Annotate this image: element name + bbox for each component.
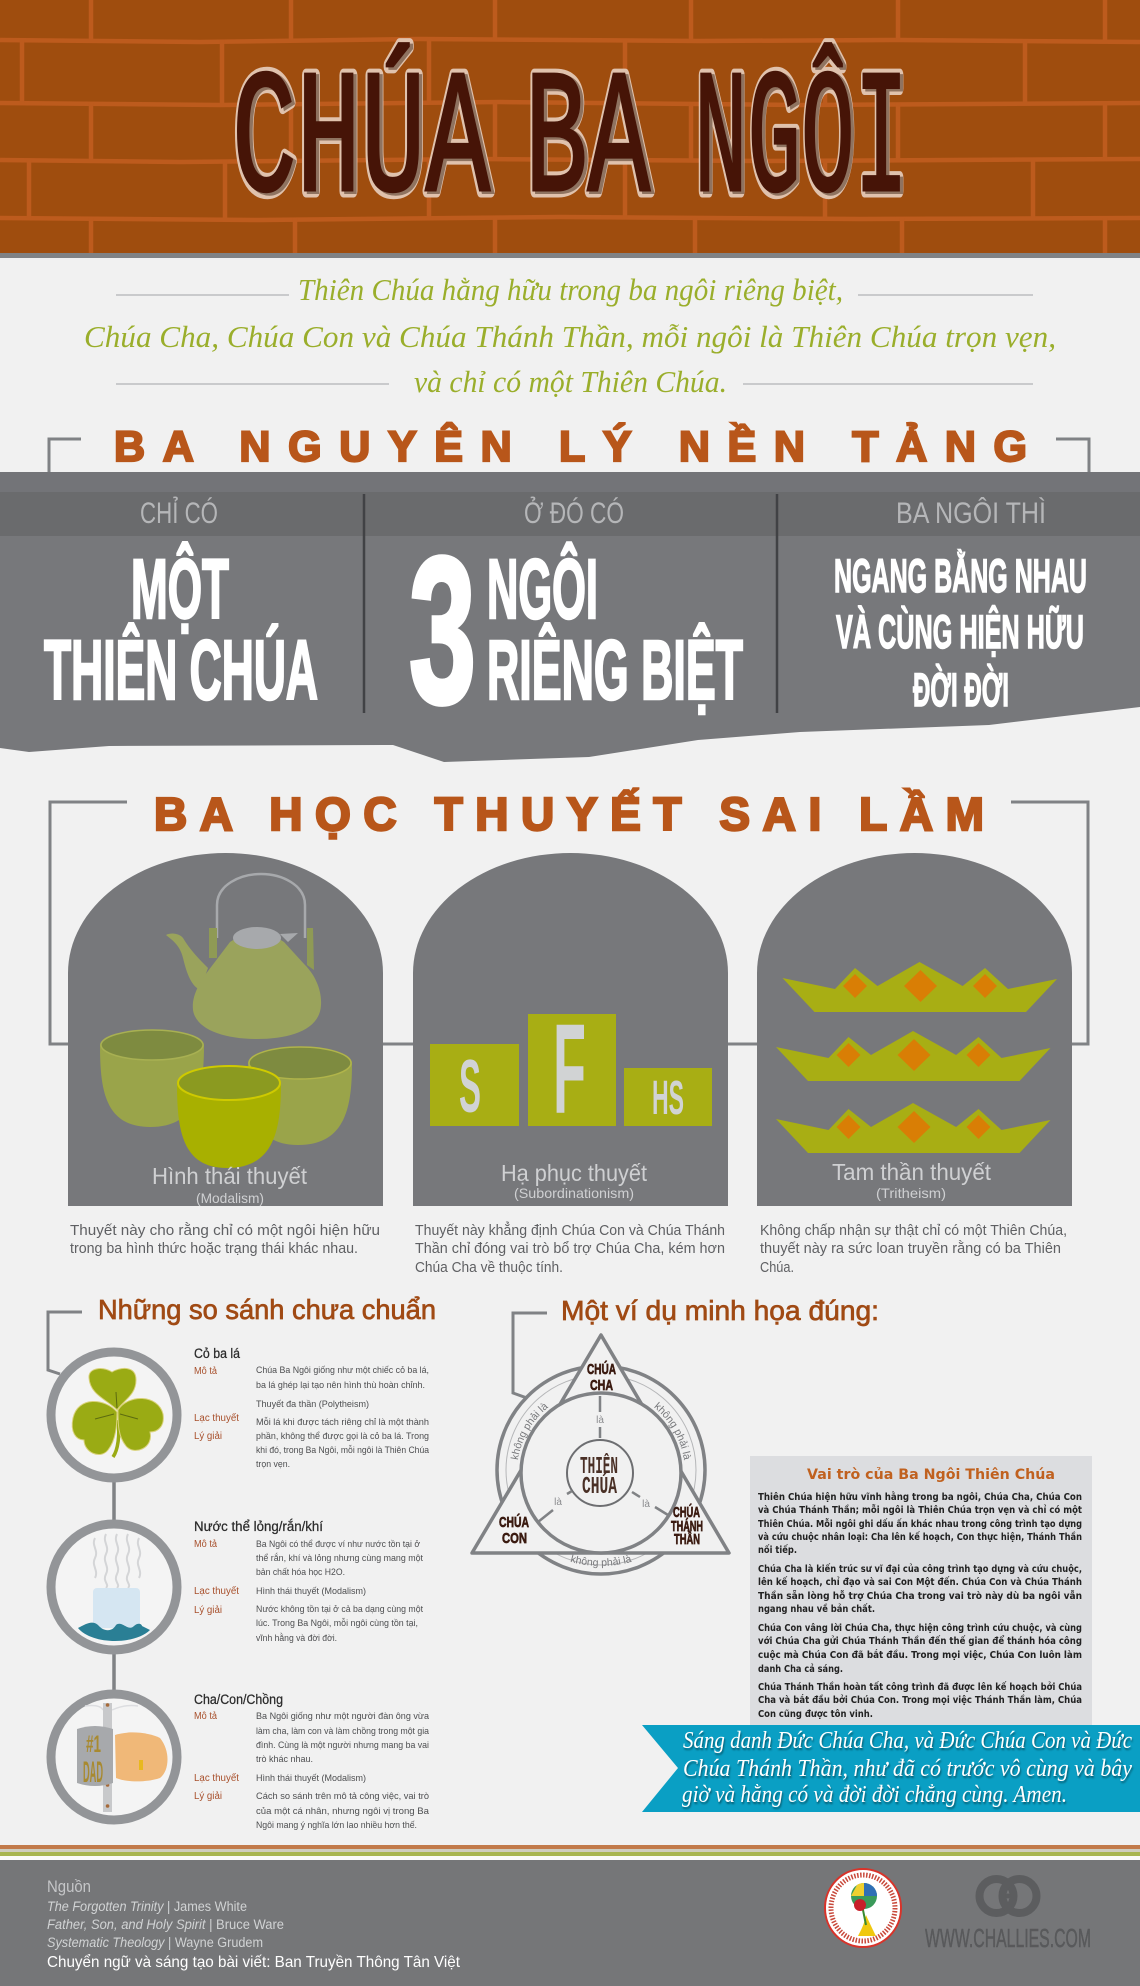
text block: tritheism: thuyết này ra sức loan truyền rằng có ba Thiên (760, 1240, 1061, 1257)
text block: modalism: Thuyết này cho rằng chỉ có một ngôi hiện hữu (70, 1222, 380, 1239)
arch caption: Tam thần thuyết (832, 1159, 992, 1185)
footer stripes (0, 1845, 1140, 1860)
text block: subordinationism (415, 1221, 725, 1276)
roles text: Thần sẵn lòng hỗ trợ Chúa Cha trong vai trò này dù ba ngôi vẫn (758, 1589, 1082, 1602)
title: NGÔI (697, 45, 911, 245)
text block: father son husband: làm cha, làm con và làm chồng trong một gia (256, 1726, 430, 1737)
text block: subordinationism: Thần chỉ đóng vai trò bổ trợ Chúa Cha, kém hơn (415, 1240, 725, 1257)
arch caption (832, 1159, 992, 1201)
diagram labels: là (554, 1415, 650, 1510)
arch caption: (Subordinationism) (514, 1185, 634, 1201)
icon: crown top (782, 962, 1057, 1012)
text block: clover: Mỗi lá khi được tách riêng chỉ là một thành (256, 1417, 429, 1428)
icon: water states (51, 1524, 177, 1650)
text block: water (194, 1519, 423, 1644)
text block: clover: Cỏ ba lá (194, 1346, 240, 1361)
column: three persons: NGÔI (487, 542, 598, 636)
icon: dad mug (51, 1694, 177, 1820)
roles text: Thiên Chúa. Mỗi ngôi ghi dấu ấn khác nhau trong công trình tạo dựng (758, 1517, 1082, 1530)
column: equal and eternal: ĐỜI ĐỜI (913, 663, 1009, 716)
icon: clover (51, 1352, 177, 1478)
title: BA (528, 45, 653, 245)
intro text block: Thiên Chúa hằng hữu trong ba ngôi riêng biệt, (298, 272, 843, 307)
column: equal and eternal: BA NGÔI THÌ (896, 496, 1046, 530)
block: HS (624, 1068, 712, 1126)
heading: ba học thuyết sai lầm: BA HỌC THUYẾT SAI LẦM (154, 788, 984, 840)
panel: modalism (68, 853, 383, 1206)
panel: subordinationism (413, 853, 728, 1206)
text block: clover: Chúa Ba Ngôi giống như một chiếc cỏ ba lá, (256, 1365, 429, 1376)
icon: crown bottom (776, 1103, 1050, 1153)
sources: Nguồn (47, 1877, 91, 1896)
title (232, 43, 911, 245)
heading: những so sánh chưa chuẩn: Những so sánh chưa chuẩn (98, 1294, 436, 1325)
text block: water: Hình thái thuyết (Modalism) (256, 1586, 366, 1597)
diagram labels: là: là (642, 1499, 650, 1510)
icon: front cup (177, 1066, 281, 1168)
intro text block: Chúa Cha, Chúa Con và Chúa Thánh Thần, mỗi ngôi là Thiên Chúa trọn vẹn, (84, 319, 1056, 354)
text block: tritheism (760, 1222, 1067, 1276)
title: CHÚA (233, 44, 491, 244)
icon: right cup (248, 1047, 352, 1145)
text block: water: bản chất hóa học H2O. (256, 1567, 345, 1578)
arch caption: Hạ phục thuyết (501, 1160, 648, 1186)
text block: water: vĩnh hằng và đời đời. (256, 1633, 337, 1644)
arch caption (501, 1160, 648, 1201)
diagram labels: không phải là: không phải là (654, 1402, 691, 1460)
banner: doxology (642, 1725, 1140, 1812)
text block: subordinationism: Thuyết này khẳng định Chúa Con và Chúa Thánh (415, 1221, 725, 1239)
roles text: Chúa Con vâng lời Chúa Cha, thực hiện công trình cứu chuộc, và cùng (758, 1622, 1082, 1634)
text block: subordinationism: Chúa Cha về thuộc tính. (415, 1259, 563, 1276)
roles text: danh Cha cả sáng. (758, 1663, 843, 1675)
panel: footer (0, 1860, 1140, 1986)
diagram corner labels: CON (502, 1530, 527, 1547)
text block: father son husband: trò khác nhau. (256, 1754, 313, 1765)
text block: father son husband: Mô tả (194, 1711, 217, 1722)
diagram labels: không phải là: không phải là (570, 1554, 632, 1568)
diagram corner labels: CHÚA (587, 1360, 616, 1378)
text block: father son husband (194, 1692, 430, 1831)
icon: community logo (825, 1869, 901, 1947)
column: three persons: RIÊNG BIỆT (487, 623, 743, 717)
column: one God (44, 496, 318, 717)
text block: father son husband: Lý giải (194, 1791, 222, 1802)
text block: modalism (70, 1222, 380, 1257)
icon: dad mug: DAD (83, 1756, 103, 1789)
icon: left cup (100, 1030, 204, 1127)
sources: Systematic Theology | Wayne Grudem (47, 1935, 263, 1950)
text block: water: Lạc thuyết (194, 1585, 239, 1597)
comparison connector (112, 1480, 116, 1692)
diagram corner labels: THÁNH (671, 1518, 703, 1535)
roles text: cuộc mà Chúa Con đã bắt đầu. Trong mọi việc, Chúa Con luôn làm (758, 1648, 1082, 1661)
column: three persons (409, 496, 743, 747)
text block: father son husband: Lạc thuyết (194, 1772, 239, 1784)
title: NGÔI (694, 43, 908, 243)
roles text: Con cũng được tôn vinh. (758, 1708, 873, 1720)
text block: water: Ba Ngôi có thể được ví như nước tồn tại ở (256, 1539, 420, 1550)
diagram corner labels: CHA (590, 1377, 613, 1394)
arch caption: (Modalism) (196, 1190, 264, 1206)
text block: father son husband: Hình thái thuyết (Modalism) (256, 1773, 366, 1784)
column: equal and eternal (834, 496, 1087, 716)
icon: crown middle (776, 1031, 1050, 1081)
title: BA (525, 43, 650, 243)
column: one God: CHỈ CÓ (140, 496, 218, 530)
roles text: Cha và bắt đầu bởi Chúa Con. Trong mọi việc Thánh Thần làm, Chúa (758, 1693, 1082, 1706)
sources: The Forgotten Trinity | James White (47, 1899, 247, 1914)
text block: father son husband: Ba Ngôi giống như một người đàn ông vừa (256, 1711, 430, 1722)
block: HS: HS (652, 1072, 684, 1125)
panel: roles of the trinity: Vai trò của Ba Ngôi Thiên Chúa (807, 1467, 1055, 1483)
roles text: với Chúa Cha gửi Chúa Thánh Thần đến thế gian để thánh hóa công (758, 1634, 1082, 1647)
heading: một ví dụ minh họa đúng: Một ví dụ minh họa đúng: (561, 1295, 879, 1326)
text block: clover: trọn vẹn. (256, 1459, 290, 1470)
column: one God: THIÊN CHÚA (44, 623, 318, 717)
diagram center: thiên chúa: CHÚA (582, 1472, 617, 1501)
roles text: lên kế hoạch, chỉ đạo và sai Con Một đến. Chúa Con và Chúa Thánh (758, 1575, 1082, 1588)
text block: water: Lý giải (194, 1605, 222, 1616)
roles text: Chúa Cha là kiến trúc sư vĩ đại của công trình tạo dựng và cứu chuộc, (758, 1562, 1082, 1575)
diagram corner labels: CHÚA (499, 1513, 529, 1531)
text block: water: lúc. Trong Ba Ngôi, mỗi ngôi cùng tồn tại, (256, 1618, 418, 1629)
title: CHÚA (232, 43, 490, 243)
column: three persons: Ở ĐÓ CÓ (524, 496, 624, 530)
diagram corner labels (499, 1360, 703, 1548)
panel: tritheism (757, 853, 1072, 1206)
text block: clover: Mô tả (194, 1366, 217, 1377)
diagram labels: là: là (596, 1415, 604, 1426)
banner: doxology: giờ và hằng có và đời đời chẳng cùng. Amen. (682, 1781, 1067, 1808)
block: F (528, 998, 616, 1141)
title: CHÚA (235, 45, 493, 245)
roles text: và cứu chuộc nhân loại: Cha lên kế hoạch, Con thực hiện, Thánh Thần (758, 1530, 1082, 1543)
text block: father son husband: Cách so sánh trên mô tả công việc, vai trò (256, 1791, 429, 1802)
text block: clover: phần, không thể được gọi là cỏ ba lá. Trong (256, 1431, 429, 1442)
block: F: F (553, 998, 586, 1141)
diagram corner labels: THẦN (674, 1531, 700, 1548)
text block: water: Nước không tồn tại ở cả ba dạng cùng một (256, 1604, 423, 1615)
roles text: và Chúa Thánh Thần; mỗi ngôi là Thiên Chúa trọn vẹn và chỉ có một (758, 1503, 1082, 1516)
diagram labels: là: là (554, 1497, 562, 1508)
text block: father son husband: đình. Cùng là một người nhưng mang ba vai (256, 1740, 429, 1751)
text block: clover: Thuyết đa thần (Polytheism) (256, 1399, 369, 1410)
panel: three principles (0, 472, 1140, 762)
text block: father son husband: của một cá nhân, nhưng ngôi vị trong Ba (256, 1806, 430, 1817)
text block: clover: ba lá ghép lại tạo nên hình thù hoàn chỉnh. (256, 1380, 425, 1391)
sources: Father, Son, and Holy Spirit | Bruce Ware (47, 1917, 284, 1932)
block: S (430, 1044, 519, 1128)
icon: dad mug: #1 (86, 1731, 101, 1758)
text block: water: Nước thể lỏng/rắn/khí (194, 1519, 323, 1534)
panel: brick header (0, 0, 1140, 258)
diagram labels: không phải là: không phải là (510, 1404, 548, 1460)
icon: challies logo (925, 1879, 1091, 1953)
text block: clover: khi đó, trong Ba Ngôi, mỗi ngôi là Thiên Chúa (256, 1445, 430, 1456)
roles text (758, 1490, 1082, 1720)
intro text block (84, 272, 1056, 399)
text block: water: thể rắn, khí và lỏng nhưng cùng mang một (256, 1553, 423, 1564)
diagram center: thiên chúa (580, 1453, 618, 1501)
diagram corner labels: CHÚA (673, 1503, 700, 1521)
text block: tritheism: Chúa. (760, 1259, 794, 1276)
roles text: Thiên Chúa hiện hữu vĩnh hằng trong ba ngôi, Chúa Cha, Chúa Con (758, 1490, 1082, 1503)
heading: những so sánh chưa chuẩn (48, 1294, 436, 1374)
column: one God: MỘT (131, 542, 229, 636)
column: three persons: 3 (409, 515, 476, 747)
text block: clover (194, 1346, 430, 1470)
block: S: S (459, 1044, 481, 1128)
arch caption (152, 1163, 308, 1206)
roles text: ngang nhau về bản chất. (758, 1602, 875, 1615)
panel: roles of the trinity (750, 1456, 1092, 1736)
text block: father son husband: Ngôi mang ý nghĩa lớn lao nhiều hơn thế. (256, 1820, 417, 1831)
diagram labels: không phải là (510, 1402, 691, 1568)
diagram center: thiên chúa: THIÊN (580, 1453, 618, 1481)
roles text: Chúa Thánh Thần hoàn tất công trình đã được lên kế hoạch bởi Chúa (758, 1680, 1082, 1693)
intro text block: và chỉ có một Thiên Chúa. (414, 364, 727, 399)
text block: water: Mô tả (194, 1539, 217, 1550)
text block: modalism: trong ba hình thức hoặc trạng thái khác nhau. (70, 1240, 358, 1257)
arch caption: Hình thái thuyết (152, 1163, 308, 1189)
heading: ba nguyên lý nền tảng: BA NGUYÊN LÝ NỀN TẢNG (114, 422, 1027, 471)
heading: ba học thuyết sai lầm (50, 788, 1088, 1044)
title: BA (526, 44, 651, 244)
roles text: nối tiếp. (758, 1543, 797, 1556)
text block: father son husband: Cha/Con/Chồng (194, 1692, 283, 1707)
title: NGÔI (695, 44, 909, 244)
text block: clover: Lạc thuyết (194, 1412, 239, 1424)
icon: teapot (166, 874, 321, 1039)
sources: Chuyển ngữ và sáng tạo bài viết: Ban Truyền Thông Tân Việt (47, 1953, 461, 1971)
arch caption: (Tritheism) (876, 1185, 946, 1201)
text block: clover: Lý giải (194, 1431, 222, 1442)
sources (47, 1877, 461, 1971)
chart: trinity diagram (470, 1333, 731, 1576)
heading: một ví dụ minh họa đúng (513, 1295, 879, 1398)
text block: tritheism: Không chấp nhận sự thật chỉ có một Thiên Chúa, (760, 1222, 1067, 1239)
